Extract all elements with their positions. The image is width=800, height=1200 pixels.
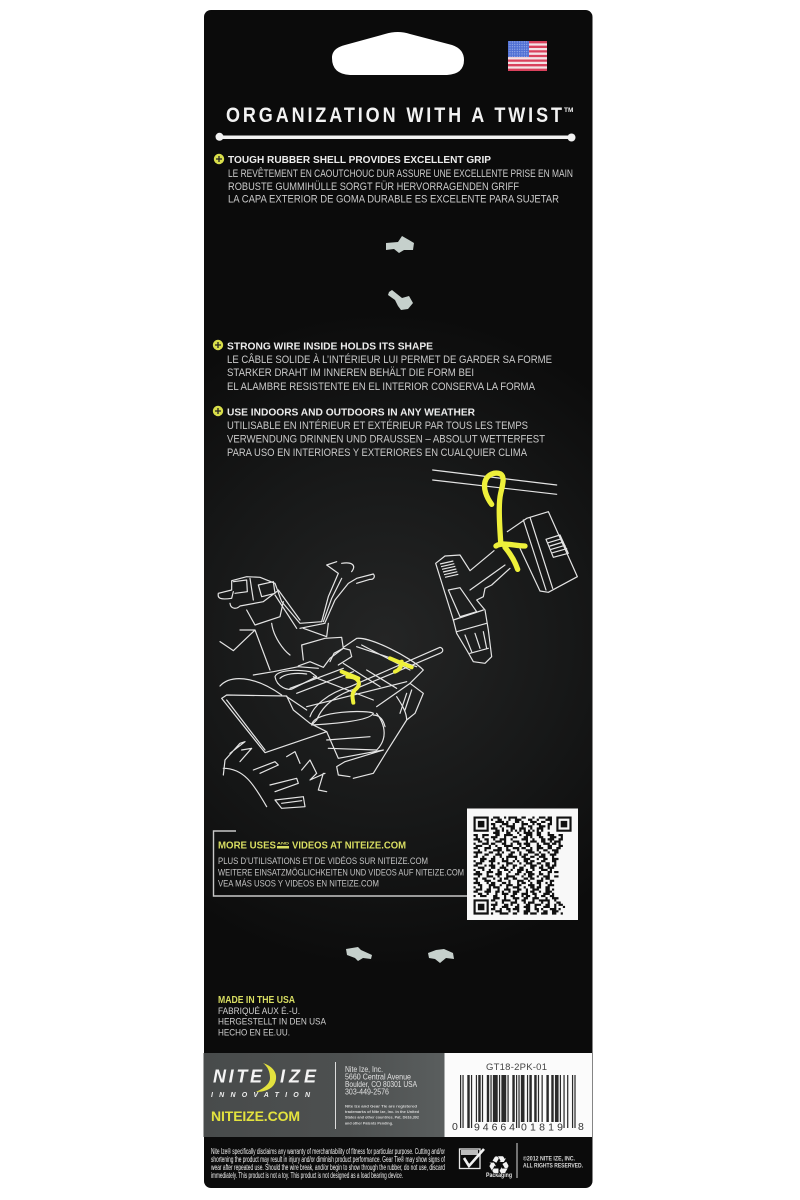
- trademark notice: Nite Ize and Gear Tie are registered: [345, 1104, 418, 1108]
- logo: INNOVATION: [211, 1092, 311, 1099]
- callout: more uses and videos: [214, 831, 467, 896]
- feature: rubber shell: TOUGH RUBBER SHELL PROVIDES EXCELLENT GRIP: [228, 154, 491, 166]
- title: TM: [564, 107, 573, 114]
- icon: recycling: Packaging: [486, 1172, 512, 1179]
- twist tie: upper: [386, 236, 414, 253]
- made in the usa: [218, 995, 327, 1038]
- title: ORGANIZATION WITH A TWIST: [226, 104, 562, 127]
- feature: rubber shell: LA CAPA EXTERIOR DE GOMA DURABLE ES EXCELENTE PARA SUJETAR: [228, 194, 559, 206]
- icon: recycling: ♻: [487, 1152, 511, 1182]
- feature: strong wire: [213, 340, 552, 393]
- made in the usa: FABRIQUÉ AUX É.-U.: [218, 1006, 300, 1017]
- panel: barcode: 8: [578, 1121, 584, 1133]
- feature: any weather: USE INDOORS AND OUTDOORS IN ANY WEATHER: [227, 406, 475, 418]
- feature: strong wire: LE CÂBLE SOLIDE À L’INTÉRIEUR LUI PERMET DE GARDER SA FORME: [227, 353, 552, 366]
- address: Nite Ize, Inc.: [345, 1064, 383, 1074]
- logo: NITE: [213, 1066, 263, 1086]
- feature: strong wire: EL ALAMBRE RESISTENTE EN EL INTERIOR CONSERVA LA FORMA: [227, 381, 536, 393]
- legal disclaimer: [210, 1147, 445, 1180]
- logo: IZE: [280, 1066, 317, 1086]
- copyright: ALL RIGHTS RESERVED.: [523, 1162, 583, 1170]
- twist tie: bottom right: [428, 949, 454, 963]
- illustration: atv with rack: [218, 562, 443, 808]
- trademark notice: and other Patents Pending.: [345, 1120, 393, 1126]
- legal disclaimer: immediately. This product is not a toy. This product is not designed as a load bearing device.: [211, 1171, 403, 1180]
- legal disclaimer: shortening the product may result in injury and/or diminish product performance. Gear Tie® may show signs of: [211, 1155, 445, 1164]
- twist tie: bottom left: [346, 947, 372, 961]
- panel: packaging card: [204, 10, 592, 1188]
- feature: strong wire: STRONG WIRE INSIDE HOLDS ITS SHAPE: [227, 340, 433, 352]
- legal disclaimer: Nite Ize® specifically disclaims any warranty of merchantability of fitness for particular purpose. Cutting and/or: [211, 1147, 445, 1156]
- panel: barcode: 0: [452, 1121, 458, 1133]
- feature: rubber shell: LE REVÊTEMENT EN CAOUTCHOUC DUR ASSURE UNE EXCELLENTE PRISE EN MAIN: [228, 167, 573, 180]
- panel: barcode: GT18-2PK-01: [486, 1062, 547, 1073]
- hang hole: [332, 32, 464, 75]
- yellow gear tie on drill: [485, 473, 525, 569]
- feature: any weather: [213, 406, 545, 459]
- made in the usa: MADE IN THE USA: [218, 995, 295, 1006]
- address: [345, 1064, 417, 1096]
- legal disclaimer: wear after repeated use. Should the wire break, and/or begin to show through the rubber, do not use, discard: [210, 1163, 445, 1172]
- feature: rubber shell: [214, 154, 573, 206]
- feature: strong wire: STARKER DRAHT IM INNEREN BEHÄLT DIE FORM BEI: [227, 367, 474, 379]
- qr code: [467, 808, 578, 920]
- panel: nite ize brand: [204, 1053, 444, 1137]
- address: 303-449-2576: [345, 1086, 389, 1096]
- panel: barcode: [444, 1053, 592, 1137]
- feature: any weather: VERWENDUNG DRINNEN UND DRAUSSEN – ABSOLUT WETTERFEST: [227, 434, 545, 446]
- address: Boulder, CO 80301 USA: [345, 1079, 417, 1089]
- trademark notice: [345, 1104, 420, 1126]
- icon: quality check box: [460, 1149, 484, 1168]
- divider: white twist tie rod: [216, 133, 576, 142]
- website: NITEIZE.COM: [211, 1108, 300, 1124]
- made in the usa: HECHO EN EE.UU.: [218, 1028, 290, 1038]
- callout: more uses and videos: PLUS D’UTILISATIONS ET DE VIDÉOS SUR NITEIZE.COM: [218, 856, 428, 867]
- icon: american flag: [508, 41, 547, 71]
- copyright: [523, 1154, 583, 1170]
- twist tie: lower: [388, 290, 413, 310]
- callout: more uses and videos: AND: [277, 840, 289, 846]
- made in the usa: HERGESTELLT IN DEN USA: [218, 1016, 327, 1028]
- address: 5660 Central Avenue: [345, 1072, 411, 1082]
- panel: barcode: 94664: [474, 1122, 515, 1134]
- panel: barcode: 01819: [521, 1122, 563, 1134]
- logo: [211, 1063, 317, 1099]
- illustration: drill hanging from wires: [433, 470, 577, 663]
- feature: rubber shell: ROBUSTE GUMMIHÜLLE SORGT FÜR HERVORRAGENDEN GRIFF: [228, 181, 519, 193]
- callout: more uses and videos: MORE USES: [218, 840, 276, 852]
- callout: more uses and videos: WEITERE EINSATZMÖGLICHKEITEN UND VIDEOS AUF NITEIZE.COM: [218, 868, 464, 878]
- trademark notice: States and other countries. Pat. D616,392: [345, 1114, 420, 1120]
- callout: more uses and videos: VIDEOS AT NITEIZE.COM: [292, 840, 406, 852]
- copyright: ©2012 NITE IZE, INC.: [523, 1154, 575, 1162]
- trademark notice: trademarks of Nite Ize, Inc. in the United: [345, 1109, 420, 1114]
- yellow gear ties on atv: [342, 658, 412, 703]
- feature: any weather: PARA USO EN INTERIORES Y EXTERIORES EN CUALQUIER CLIMA: [227, 447, 528, 459]
- callout: more uses and videos: VEA MÁS USOS Y VIDEOS EN NITEIZE.COM: [218, 878, 379, 890]
- feature: any weather: UTILISABLE EN INTÉRIEUR ET EXTÉRIEUR PAR TOUS LES TEMPS: [227, 419, 528, 432]
